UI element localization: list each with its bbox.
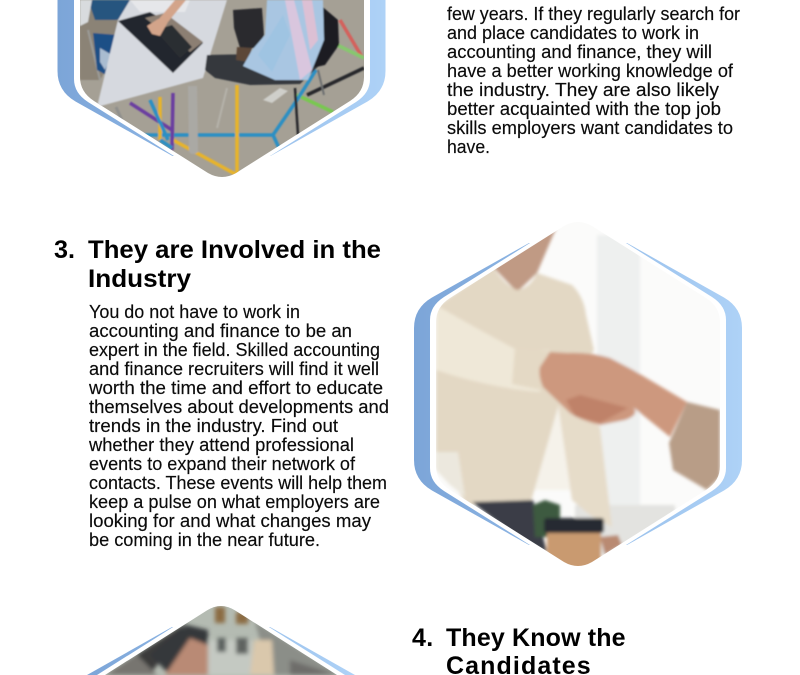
text block: point 3 body: looking for and what changes may (89, 511, 371, 531)
text block: point 2 continued: few years. If they regularly search for (447, 4, 740, 24)
text block: point 3 body: You do not have to work in (89, 302, 300, 322)
text block: point 2 continued: accounting and finance, they will (447, 42, 712, 62)
text block: point 3 body: worth the time and effort to educate (88, 378, 383, 398)
text block: point 3 body: trends in the industry. Find out (89, 416, 338, 436)
heading: 4. They Know the Candidates: They Know the (446, 624, 626, 652)
text block: point 2 continued (447, 4, 740, 157)
heading: 3. They are Involved in the Industry: They are Involved in the (88, 236, 381, 264)
text block: point 2 continued: have. (447, 137, 490, 157)
text block: point 3 body: and finance recruiters will find it well (89, 359, 379, 379)
hexagon photo: man at chessboard (87, 602, 355, 675)
text block: point 3 body: expert in the field. Skilled accounting (89, 340, 380, 360)
heading: 4. They Know the Candidates: 4. (412, 624, 433, 652)
text block: point 3 body: whether they attend professional (88, 435, 354, 455)
heading: 3. They are Involved in the Industry (54, 236, 381, 293)
text block: point 2 continued: and place candidates to work in (447, 23, 699, 43)
text block: point 2 continued: have a better working knowledge of (447, 61, 734, 81)
text block: point 2 continued: skills employers want candidates to (447, 118, 733, 138)
text block: point 2 continued: the industry. They are also likely (447, 80, 719, 100)
heading: 3. They are Involved in the Industry: Industry (88, 265, 191, 293)
text block: point 2 continued: better acquainted with the top job (447, 99, 721, 119)
text block: point 3 body: be coming in the near future. (89, 530, 320, 550)
heading: 4. They Know the Candidates (412, 624, 626, 675)
hexagon photo: handshake (414, 222, 742, 570)
hexagon photo: team working at a laptop (58, 0, 386, 180)
text block: point 3 body: accounting and finance to be an (89, 321, 352, 341)
text block: point 3 body: themselves about developments and (89, 397, 389, 417)
text block: point 3 body: keep a pulse on what employers are (89, 492, 380, 512)
heading: 3. They are Involved in the Industry: 3. (54, 236, 75, 264)
text block: point 3 body: events to expand their network of (89, 454, 356, 474)
text block: point 3 body: contacts. These events will help them (89, 473, 387, 493)
text block: point 3 body (88, 302, 389, 550)
